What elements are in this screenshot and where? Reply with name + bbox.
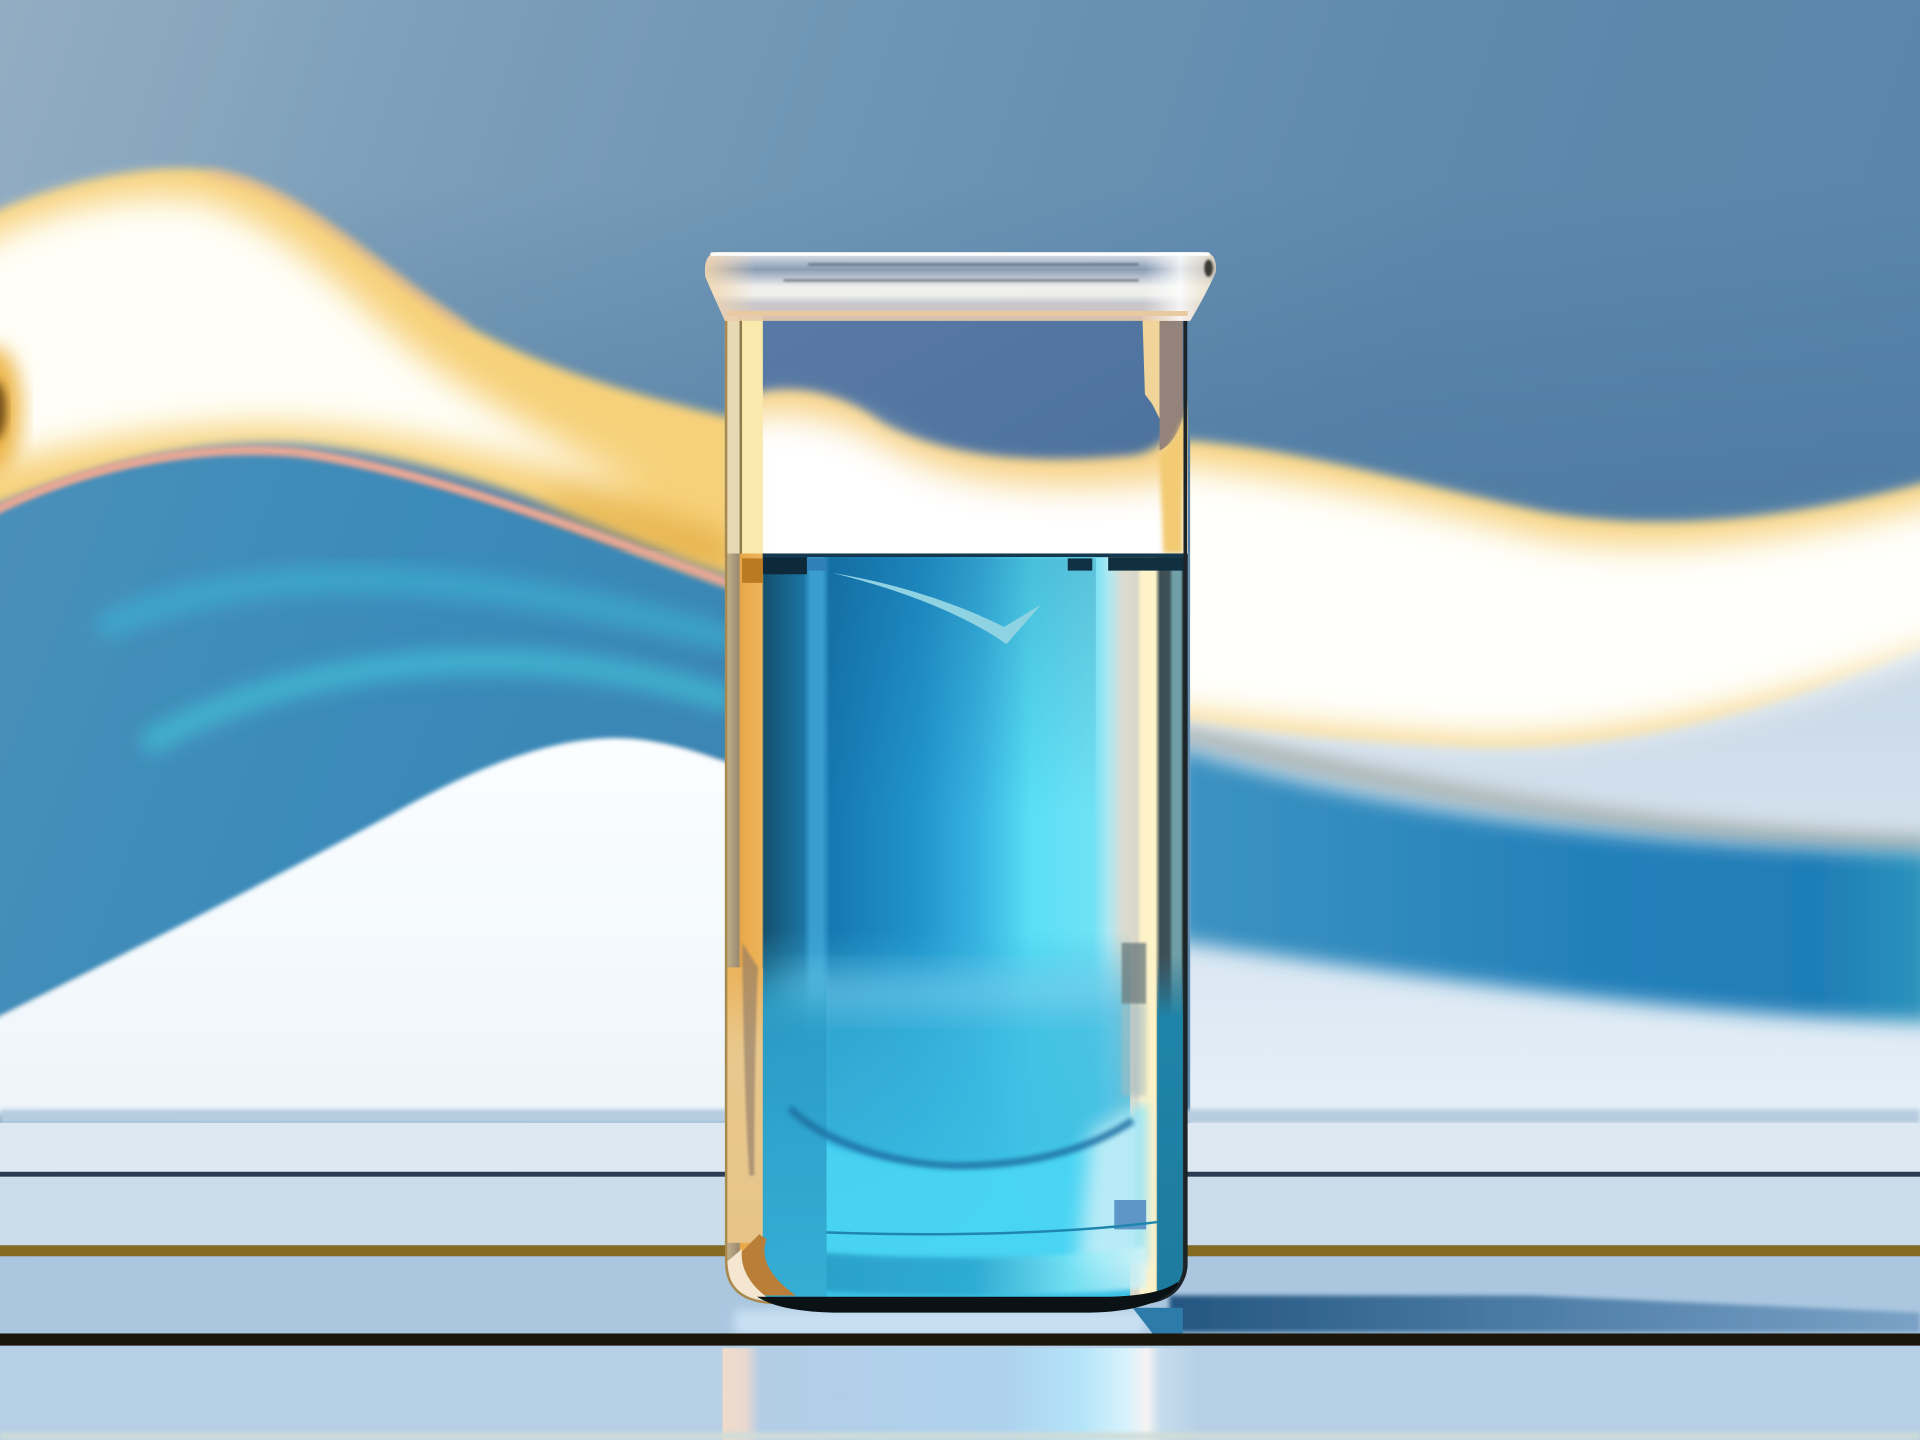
- band: light table strip: [0, 1123, 1920, 1172]
- liquid: amber foot corner: [735, 1234, 796, 1296]
- beaker wall: left outline: [726, 316, 771, 1303]
- reflection: beaker reflection on table: [722, 1348, 1194, 1440]
- streak: upper teal streak glow: [110, 580, 722, 637]
- liquid: grey panel on right: [1122, 943, 1146, 1004]
- beaker rim: [705, 252, 1216, 321]
- band: middle strip: [0, 1177, 1920, 1245]
- beaker wall: right outline: [1139, 316, 1185, 1303]
- liquid: bright area below the arc: [826, 1099, 1152, 1264]
- liquid: dark surface line: [763, 553, 1185, 557]
- panel: right waves behind the beaker: [1127, 438, 1920, 1127]
- liquid: surface highlight wedge: [833, 573, 1041, 644]
- beaker wall: left dark line: [740, 316, 742, 556]
- wave: gold flame ribbon: [1151, 438, 1920, 747]
- band: blue ribbon: [1176, 747, 1920, 1022]
- wave: gold flame ribbon: [0, 168, 735, 576]
- panel: table surface with stripes: [0, 1109, 1920, 1440]
- liquid: dark right surface marks: [1068, 557, 1184, 571]
- wave: white flame core: [1127, 459, 1920, 740]
- beaker rim: right dark glint: [1204, 260, 1213, 277]
- wave: large blue wave: [0, 457, 735, 1022]
- liquid: lower teal wall: [1157, 955, 1183, 1300]
- shadow: dark edge above the ribbon: [1176, 730, 1920, 845]
- beaker interior: refracted background: [725, 312, 1188, 557]
- liquid: blue fade on the left dark column: [763, 967, 827, 1300]
- wave: white core of the flame: [0, 197, 649, 490]
- beaker rim: lower dark streak: [784, 279, 1139, 282]
- beaker wall: left pale yellow wall: [741, 316, 763, 556]
- liquid: pale horizontal band: [784, 973, 1114, 1010]
- liquid: blue body: [725, 553, 1188, 1303]
- spot: gold glow round the ember: [0, 347, 22, 474]
- band: table edge: [0, 1109, 1920, 1124]
- band: front strip: [0, 1346, 1920, 1440]
- liquid: peach foot corner: [727, 1249, 771, 1300]
- band: pale bottom edge: [0, 1433, 1920, 1440]
- liquid: base teal band: [763, 1247, 1146, 1295]
- liquid: base line: [763, 1222, 1157, 1234]
- hill: white hill: [0, 738, 735, 1114]
- liquid: curved base reflection: [790, 1108, 1133, 1166]
- beaker rim: bottom line: [727, 311, 1188, 316]
- liquid: lower cyan area: [763, 931, 1130, 1298]
- background: darker shading toward the horizon: [0, 184, 1920, 551]
- liquid: amber top-left corner: [742, 558, 763, 583]
- liquid: dark left surface block: [763, 557, 807, 574]
- shadow: beaker shadow: [1169, 1296, 1920, 1332]
- wave: peach top edge of the flame: [208, 174, 465, 328]
- liquid: pale right glow: [1078, 1102, 1145, 1273]
- beaker rim: dark streak: [808, 263, 1139, 266]
- beaker wall: left clear strip: [725, 316, 740, 556]
- panel: left waves behind the beaker: [0, 168, 735, 1114]
- line: black stripe: [0, 1333, 1920, 1346]
- wave: amber tail of the flame: [551, 484, 735, 576]
- liquid: blue square on right: [1114, 1200, 1146, 1229]
- spot: dark ember at left edge: [0, 381, 6, 440]
- liquid: darker top shading: [826, 558, 1096, 754]
- liquid: grey left glass strip foot: [742, 943, 758, 1176]
- liquid: small blue surface square: [807, 558, 827, 571]
- shadow: teal wedge under right corner: [1133, 1308, 1183, 1335]
- beaker interior: refracted flame: [740, 381, 1188, 555]
- liquid: grey panel fade: [1122, 1004, 1146, 1096]
- beaker rim: warm ends: [705, 252, 1216, 321]
- beaker wall: right gold strip: [1160, 416, 1183, 553]
- beaker interior: gold flame edge: [762, 382, 1188, 555]
- streak: lower teal streak glow: [153, 661, 722, 741]
- line: gold stripe: [0, 1245, 1920, 1256]
- line: dark stripe: [0, 1172, 1920, 1177]
- beaker wall: right grey-brown strip: [1160, 316, 1183, 451]
- beaker: glass vessel: [705, 252, 1216, 1311]
- area: pale sky below the flame: [1176, 612, 1920, 1127]
- band: lower strip: [0, 1256, 1920, 1335]
- beaker rim: top highlight: [710, 252, 1210, 256]
- beaker interior: white flame core: [740, 390, 1188, 555]
- wave: pink edge on the blue wave: [0, 450, 735, 585]
- reflection: light pool in front of the base: [735, 1310, 1145, 1335]
- beaker wall: right upper tan strip: [1142, 316, 1160, 419]
- beaker base: dark foot shadow: [762, 1283, 1178, 1311]
- liquid: left wall foot: [725, 967, 763, 1243]
